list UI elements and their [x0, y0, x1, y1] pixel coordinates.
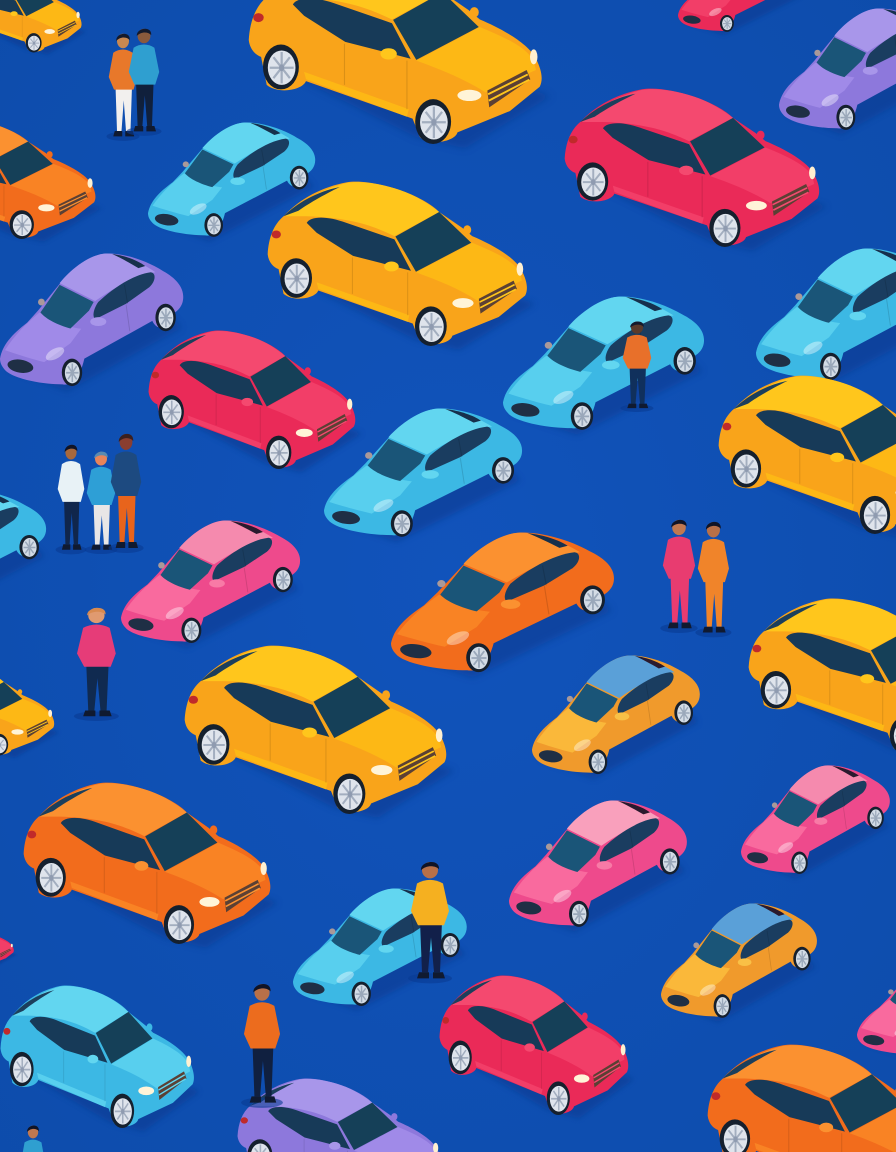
- car: pink convertible centre: [509, 800, 687, 932]
- car: gold convertible lower right: [661, 903, 817, 1022]
- car: purple left: [0, 254, 183, 391]
- people: couple top left: [106, 29, 162, 141]
- car: blue right edge: [756, 249, 896, 385]
- car: pink convertible right: [741, 765, 890, 878]
- car: purple bottom: [238, 1078, 448, 1152]
- person: man in yellow shirt: [408, 862, 452, 983]
- people: two women right: [660, 520, 731, 637]
- person: woman in pink: [74, 608, 119, 721]
- car: orange lower left: [24, 783, 278, 948]
- car: orange left edge: [0, 119, 102, 242]
- car: red bottom centre: [439, 975, 634, 1118]
- car: orange bottom right: [708, 1045, 896, 1152]
- car: red left centre: [149, 330, 362, 472]
- car: pink left edge: [0, 922, 16, 967]
- car: yellow top left: [0, 0, 86, 54]
- car: cyan bottom left: [0, 986, 200, 1131]
- car: red upper right: [565, 89, 827, 251]
- car: gold convertible: [532, 655, 700, 779]
- car: blue centre: [324, 408, 522, 542]
- car: pink right edge: [857, 955, 896, 1059]
- car: yellow right: [719, 376, 896, 538]
- car: yellow centre lower: [185, 646, 455, 818]
- car: blue left edge: [0, 490, 46, 613]
- person: at cyan car: [620, 321, 654, 412]
- car: large yellow top: [249, 0, 551, 148]
- car: purple top right: [779, 8, 896, 135]
- car: orange centre: [391, 533, 614, 677]
- car: yellow left edge: [0, 665, 59, 758]
- car: cyan centre right: [503, 297, 704, 435]
- person: bottom left: [19, 1126, 47, 1152]
- car: pink convertible left: [121, 520, 300, 648]
- car: red top edge: [678, 0, 803, 35]
- car: blue convertible: [148, 122, 315, 241]
- car: cyan lower centre: [293, 888, 467, 1011]
- people: trio left: [56, 434, 144, 554]
- car: yellow right lower: [749, 599, 896, 758]
- car: yellow centre upper: [268, 182, 535, 350]
- person: man in orange jacket: [241, 984, 283, 1108]
